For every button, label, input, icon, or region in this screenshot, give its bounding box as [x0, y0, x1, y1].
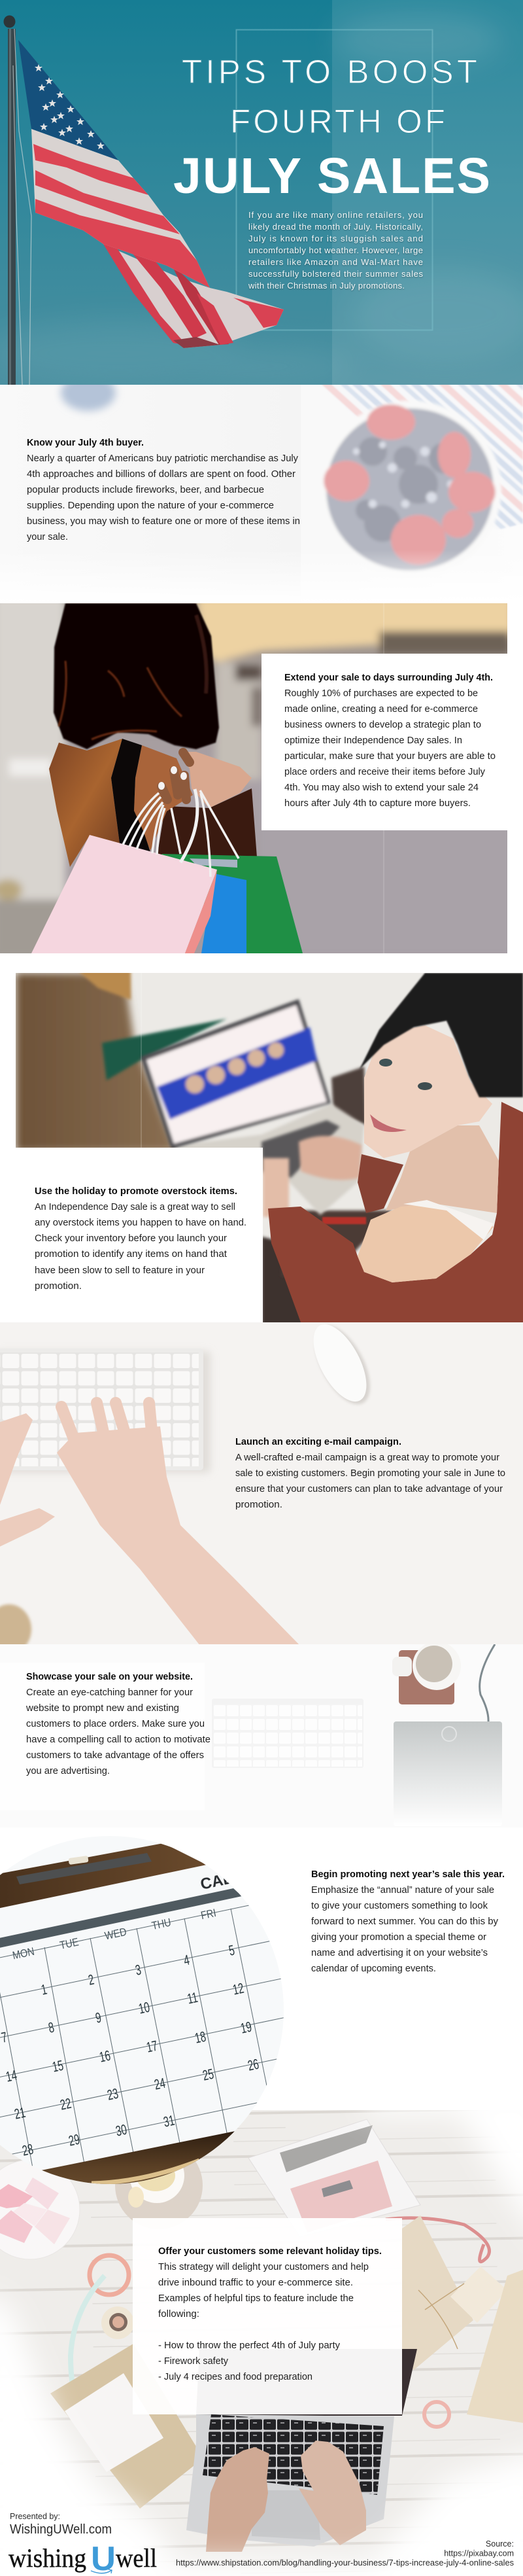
text block: extend your sale: optimize their Independence Day sales. In [284, 735, 462, 746]
text block: e-mail campaign: A well-crafted e-mail campaign is a great way to promote your [235, 1453, 499, 1463]
icon: plate of pink sweets [0, 2160, 80, 2259]
left hand [206, 2447, 269, 2552]
date numbers: 19 [239, 2019, 253, 2036]
text block: overstock items: promotion. [35, 1281, 82, 1292]
date numbers: 30 [114, 2121, 128, 2139]
flag red stripes [33, 144, 210, 288]
rust sweater [268, 1102, 523, 1322]
text block: holiday tips: - How to throw the perfect 4th of July party [158, 2340, 341, 2351]
pink ribbon [386, 2218, 489, 2262]
text block: extend your sale: hours after July 4th to capture more buyers. [284, 798, 471, 809]
icon: keyboard [0, 1349, 211, 1473]
fingers [161, 752, 190, 800]
text block: showcase on website: customers to take advantage of the offers [26, 1750, 204, 1761]
date numbers: 11 [186, 1989, 199, 2007]
lighter right column [332, 0, 523, 385]
date numbers: 14 [5, 2067, 18, 2085]
text block: e-mail campaign: sale to existing customers. Begin promoting your sale in June to [235, 1468, 505, 1479]
text block: overstock items: An Independence Day sale is a great way to sell [35, 1202, 235, 1212]
blue bag [201, 873, 246, 953]
date numbers: 1 [40, 1981, 48, 1998]
hand [188, 752, 252, 807]
hair highlights [59, 615, 207, 739]
pink bag [31, 835, 217, 953]
source credits: https://www.shipstation.com/blog/handling-your-business/7-tips-increase-july-4-online-sales [176, 2558, 514, 2567]
date numbers: 15 [51, 2057, 65, 2075]
right hand [299, 2441, 366, 2545]
hair [360, 973, 523, 1097]
text block: know your buyer: popular products include fireworks, beer, and barbecue [27, 485, 264, 495]
black top [111, 739, 150, 852]
footer: presented by: WishingUWell.com [10, 2522, 112, 2537]
icon: cup and saucer [115, 2142, 203, 2229]
text block: e-mail campaign: Launch an exciting e-mail campaign. [235, 1437, 401, 1447]
photo: woman with shopping bags [0, 595, 513, 959]
date numbers: 23 [106, 2085, 120, 2103]
text block: e-mail campaign [235, 1437, 505, 1510]
intro paragraph: If you are like many online retailers, you [248, 210, 423, 220]
intro paragraph [248, 210, 424, 291]
date numbers: 26 [246, 2056, 260, 2073]
face [364, 1025, 492, 1158]
white strap [403, 1200, 494, 1240]
text block: overstock items: any overstock items you happen to have on hand. [35, 1218, 246, 1228]
typing hand [299, 1136, 362, 1180]
text block: extend your sale: particular, make sure that your buyers are able to [284, 751, 496, 762]
laptop base [173, 1104, 364, 1215]
text block: holiday tips: Examples of helpful tips to feature include the [158, 2293, 354, 2304]
hero sky background [0, 0, 523, 385]
icon: white keyboard [212, 1699, 363, 1768]
wood top and clip [0, 1843, 207, 1922]
intro paragraph: successfully bolstered their summer sales [248, 269, 424, 279]
text block: extend your sale: business owners to develop a strategic plan to [284, 720, 481, 730]
icon: tablet [248, 2119, 420, 2237]
text block: overstock items: promotion to identify any items on hand that [35, 1249, 227, 1260]
text block: promoting next year: to give your customers something to look [311, 1901, 488, 1911]
hair [54, 603, 219, 749]
text block: overstock items: Use the holiday to promote overstock items. [35, 1186, 237, 1197]
panel: relevant holiday tips card [133, 2218, 402, 2414]
white nails [158, 766, 187, 790]
date numbers: 29 [67, 2131, 81, 2149]
icon: flag pole [4, 16, 31, 385]
text block: holiday tips: - July 4 recipes and food preparation [158, 2372, 312, 2382]
text block: know your buyer: Know your July 4th buyer. [27, 438, 144, 448]
footer: presented by [10, 2511, 112, 2537]
icon: coffee mug on coaster [392, 1642, 461, 1704]
pale desk background [0, 1322, 523, 1644]
kraft gift boxes [402, 2215, 523, 2423]
pale background [0, 1644, 523, 1827]
gold fringe at circle edge [92, 2161, 199, 2183]
bare back [49, 739, 122, 867]
text block: e-mail campaign: ensure that your customers can plan to take advantage of your [235, 1484, 503, 1494]
logo: wishing U well [8, 2540, 157, 2576]
text block: holiday tips: - Firework safety [158, 2356, 229, 2367]
white veil over the photo [322, 385, 523, 572]
text block: holiday tips: drive inbound traffic to your e-commerce site. [158, 2278, 353, 2288]
dark desk behind laptop [331, 1067, 366, 1125]
photo: woman at laptop [16, 968, 523, 1325]
text block: extend your sale: Extend your sale to days surrounding July 4th. [284, 673, 493, 683]
logo: wishing U well: well [116, 2543, 157, 2573]
text block: showcase on website: you are advertising. [26, 1766, 110, 1776]
text block: promoting next year [311, 1869, 505, 1974]
text block: know your buyer: business, you may wish to feature one or more of these items in [27, 516, 300, 527]
footer: presented by: Presented by: [10, 2511, 60, 2521]
date numbers [0, 1942, 260, 2159]
intro paragraph: July is known for its sluggish sales and [248, 234, 423, 243]
date numbers: 2 [87, 1971, 95, 1988]
date numbers: 8 [47, 2019, 56, 2036]
text block: showcase on website: Create an eye-catching banner for your [26, 1687, 193, 1698]
bag handles [123, 789, 239, 877]
kraft envelope and paper [50, 2344, 203, 2509]
source credits [176, 2539, 514, 2567]
text block: e-mail campaign: promotion. [235, 1500, 282, 1510]
date numbers: 25 [201, 2066, 215, 2083]
text block: promoting next year: giving your promotion a special theme or [311, 1932, 486, 1943]
text block: overstock items: Check your inventory before you launch your [35, 1233, 227, 1244]
text block: extend your sale: Roughly 10% of purchases are expected to be [284, 688, 478, 699]
panel: overstock items [0, 968, 523, 1325]
text block: know your buyer: your sale. [27, 532, 68, 542]
date numbers: 28 [21, 2141, 35, 2159]
text block: overstock items: have been slow to sell to feature in your [35, 1265, 205, 1276]
text block: know your buyer: Nearly a quarter of Americans buy patriotic merchandise as July [27, 453, 299, 464]
strawberries [324, 404, 496, 565]
weekday labels: THU [151, 1916, 172, 1932]
blurred blue object [61, 374, 116, 411]
dark underarm shadow [157, 788, 257, 857]
flag main body white stripes [31, 129, 210, 288]
icon: American flag [18, 40, 284, 348]
date numbers: 9 [94, 2009, 103, 2026]
text block: showcase on website [25, 1672, 211, 1776]
text block: promoting next year: forward to next summer. You can do this by [311, 1916, 499, 1927]
blurred street backdrop [0, 595, 513, 959]
wooden floor [16, 973, 177, 1152]
intro paragraph: uncomfortably hot weather. However, large [248, 245, 423, 255]
text block: showcase on website: website to prompt new and existing [25, 1703, 179, 1714]
text block: promoting next year: name and advertising it on your website’s [311, 1948, 488, 1958]
date numbers: 17 [145, 2038, 159, 2055]
ribbon rings and tape [71, 2255, 449, 2427]
text block: showcase on website: customers to place orders. Make sure you [26, 1719, 205, 1729]
pale background [26, 385, 302, 564]
date numbers: 22 [59, 2095, 73, 2113]
text block: promoting next year: calendar of upcoming events. [311, 1964, 436, 1974]
bare upper arm [134, 745, 193, 851]
weekday labels: MON [12, 1946, 35, 1962]
text block: holiday tips [158, 2246, 382, 2382]
translucent text card [0, 1663, 205, 1810]
logo: wishing U well: wishing [8, 2543, 86, 2573]
text block: holiday tips: following: [158, 2309, 199, 2320]
flag tail [103, 244, 284, 348]
text block: know your buyer: supplies. Depending upon the nature of your e-commerce [27, 501, 274, 511]
date numbers: 18 [194, 2028, 207, 2046]
month title: CAL [199, 1869, 234, 1894]
panel: e-mail campaign [0, 1316, 523, 1654]
panel: hero header [0, 0, 523, 386]
white text card [0, 1148, 263, 1322]
intro paragraph: likely dread the month of July. Historically, [248, 222, 423, 232]
icon: laptop with typing hands [186, 2414, 394, 2552]
intro paragraph: with their Christmas in July promotions. [248, 281, 405, 291]
text block: holiday tips: Offer your customers some relevant holiday tips. [158, 2246, 382, 2257]
text block: extend your sale: place orders and receive their items before July [284, 767, 486, 777]
weekday labels: FRI [200, 1907, 217, 1922]
date numbers: 10 [137, 1999, 151, 2017]
source credits: https://pixabay.com [444, 2549, 514, 2558]
white plank desk [0, 2110, 523, 2576]
weekday labels: TUE [59, 1936, 80, 1952]
icon: tablet with cable [394, 1644, 502, 1826]
panel: extend your sale [0, 595, 513, 959]
text block: extend your sale: made online, creating a need for e-commerce [284, 704, 478, 715]
wood below calendar [26, 2131, 268, 2225]
date numbers: 3 [134, 1962, 143, 1978]
date numbers: 24 [153, 2075, 167, 2092]
date numbers: 12 [231, 1980, 245, 1998]
source credits: Source: [486, 2539, 514, 2549]
calendar grid [0, 1903, 288, 2189]
date numbers: 4 [182, 1952, 191, 1968]
text block: know your buyer [27, 438, 300, 542]
text block: promoting next year: Emphasize the “annual” nature of your sale [311, 1885, 494, 1896]
panel: showcase on website [0, 1642, 523, 1827]
text block: know your buyer: 4th approaches and billions of dollars are spent on food. Other [27, 469, 295, 480]
laptop screen [141, 999, 331, 1149]
header strip [0, 1888, 242, 1962]
laptop lid behind card [196, 2349, 417, 2416]
title: fourth of: FOURTH OF [230, 103, 445, 140]
date numbers: 21 [13, 2104, 27, 2122]
date numbers: 31 [162, 2112, 176, 2130]
text block: promoting next year: Begin promoting next year’s sale this year. [311, 1869, 505, 1880]
thin outline frame [237, 30, 433, 330]
text block: showcase on website: Showcase your sale on your website. [26, 1672, 193, 1682]
green object [102, 1019, 227, 1080]
translucent white card [133, 2218, 402, 2414]
date numbers: 7 [0, 2029, 8, 2045]
title: tips to boost: TIPS TO BOOST [182, 53, 477, 90]
panel: holiday tips flat-lay photo [0, 2110, 523, 2576]
neck [386, 1125, 499, 1213]
title: july sales: JULY SALES [173, 148, 490, 204]
striped cloth [317, 379, 523, 530]
text block: holiday tips: This strategy will delight your customers and help [158, 2262, 369, 2272]
flag blue canton with stars [18, 40, 118, 160]
icon: computer mouse [303, 1316, 381, 1413]
icon: calendar in circular crop [0, 1832, 288, 2225]
white text card [262, 654, 507, 830]
laptop keys [262, 1120, 340, 1178]
icon: typing hands [0, 1403, 300, 1646]
eyes and lips [370, 1059, 432, 1132]
calendar paper [0, 1832, 288, 2189]
text block: extend your sale: 4th. You may also wish to extend your sale 24 [284, 783, 479, 793]
panel: promoting next year [0, 1832, 505, 2225]
date numbers: 5 [228, 1942, 236, 1958]
weekday labels [12, 1907, 217, 1962]
text block: overstock items [35, 1186, 246, 1292]
panel: know your buyer [26, 385, 523, 572]
weekday labels: WED [104, 1926, 127, 1943]
intro paragraph: retailers like Amazon and Wal-Mart have [248, 257, 423, 267]
shoulder [358, 1204, 494, 1282]
icon: bowl of berries [318, 400, 501, 578]
text block: extend your sale [284, 673, 496, 809]
text block: showcase on website: have a compelling call to action to motivate [26, 1735, 211, 1745]
date numbers: 16 [98, 2047, 112, 2065]
green bag [161, 854, 303, 953]
